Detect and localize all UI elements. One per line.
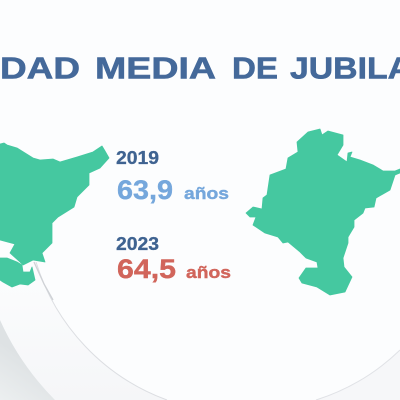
title: DAD <box>0 50 80 86</box>
2023 value: 64,5 <box>117 254 176 284</box>
2019 value: 63,9 <box>117 175 173 205</box>
title: DE <box>232 50 278 86</box>
2019 label: 2019 <box>116 148 159 168</box>
map: right region <box>246 129 400 295</box>
2019 value <box>117 175 229 205</box>
2023 value: años <box>186 263 231 282</box>
2019 value: años <box>184 184 229 203</box>
map: left region <box>0 143 109 287</box>
2023 label: 2023 <box>116 234 159 254</box>
title <box>0 50 400 86</box>
title: MEDIA <box>95 50 216 86</box>
title: JUBILA <box>290 50 400 86</box>
2023 value <box>117 254 231 284</box>
